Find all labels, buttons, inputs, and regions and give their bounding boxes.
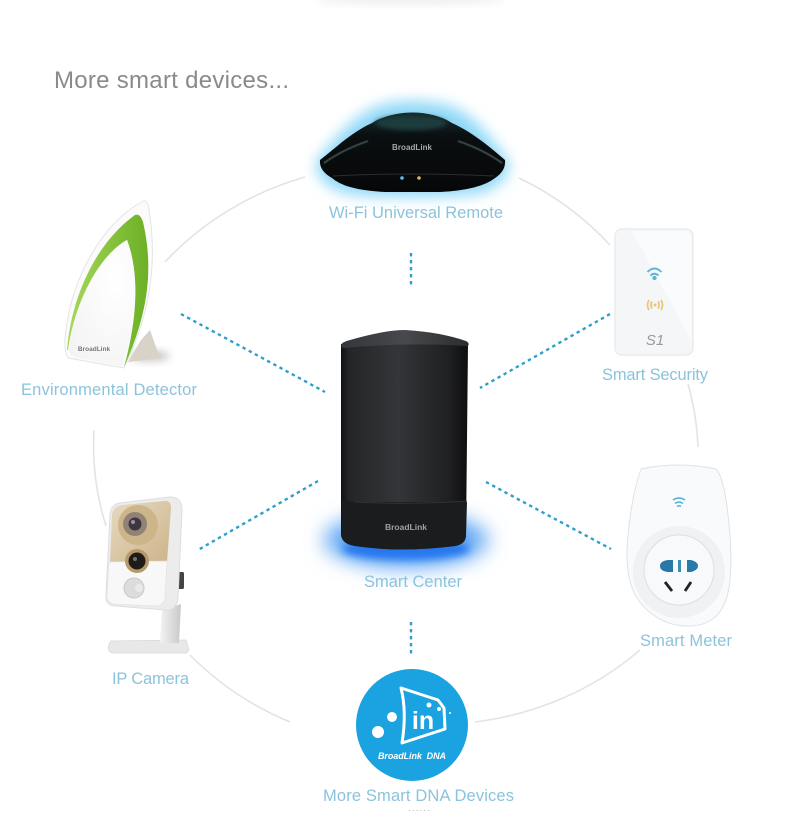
label: Environmental Detector: Environmental Detector [21,381,198,399]
S1 model mark: S1 [646,332,664,349]
label: IP Camera: IP Camera [112,670,190,688]
device: smart security sensor [615,229,693,355]
device: IP camera [106,497,189,653]
icon: wifi [648,268,662,279]
BroadLink logo on detector: BroadLink [78,346,110,353]
center device: smart center [324,330,488,568]
device: Wi-Fi universal remote [316,101,509,197]
icon: wifi [673,498,685,506]
BroadLink logo on remote: BroadLink [392,143,433,152]
ring connecting the devices [94,177,698,722]
badge text: BroadLink DNA [378,751,446,761]
label: Smart Center: Smart Center [364,573,462,591]
label: Smart Security: Smart Security [602,366,709,384]
BroadLink logo on center device: BroadLink [385,522,427,532]
label: More Smart DNA Devices: More Smart DNA Devices [323,787,514,805]
ellipsis dots: ...... [408,803,430,814]
label: Wi-Fi Universal Remote: Wi-Fi Universal Remote [329,204,503,222]
label: Smart Meter: Smart Meter [640,632,732,650]
badge: BroadLink DNA [356,669,468,781]
device: environmental detector [65,201,170,368]
dotted connector lines [181,253,611,655]
title: More smart devices... [54,67,289,94]
socket holes [660,560,698,591]
top edge shadow [315,0,505,5]
icon: DNA in mark: in [412,707,434,735]
device: smart meter socket [627,465,731,626]
icon: alarm signal [648,300,662,310]
